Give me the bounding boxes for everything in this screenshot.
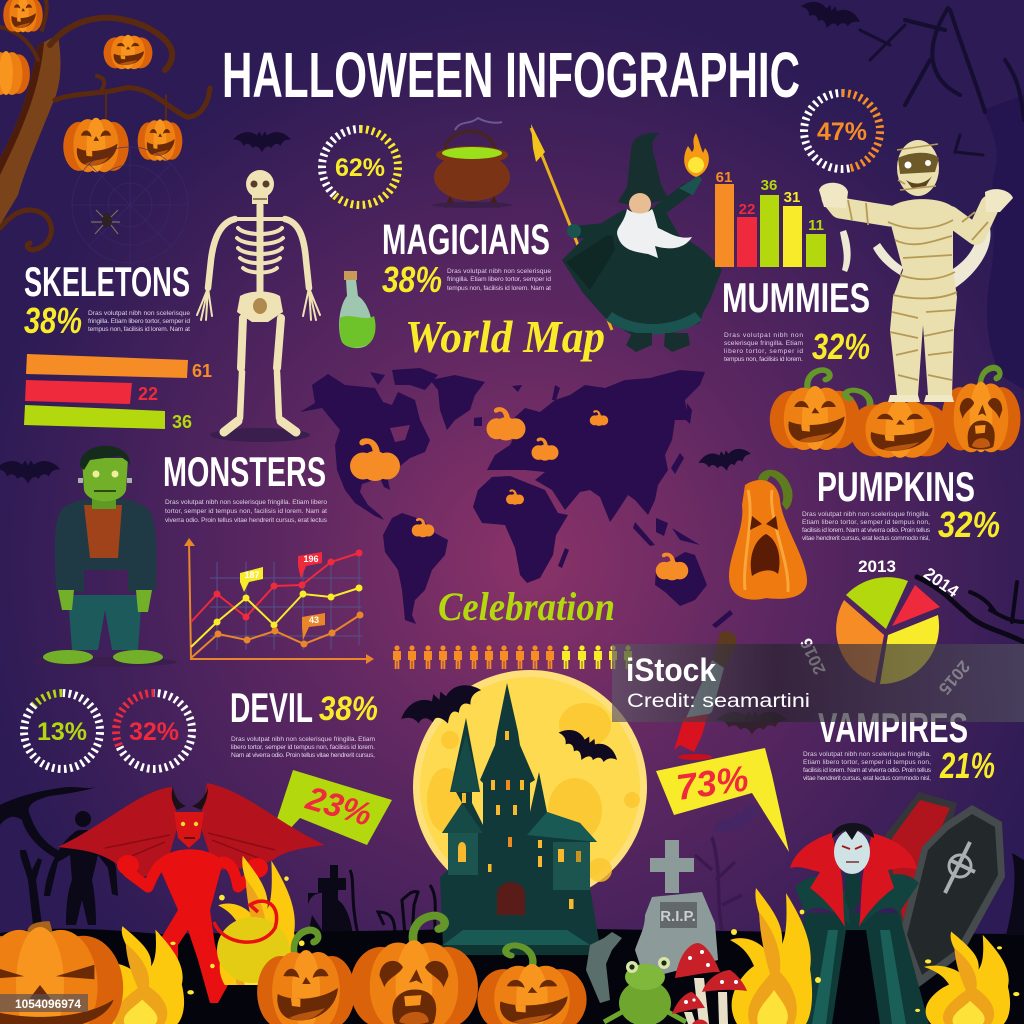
map pumpkin: south america [412,518,434,537]
bat: top right [797,0,862,36]
text: mummies: Dras volutpat nibh non [724,332,803,339]
ground [0,928,1024,1024]
text: devil: Dras volutpat nibh non scelerisque fringilla. Etiam [231,736,376,743]
label: 2014: 2014 [920,564,963,601]
map pumpkin: africa [506,489,524,505]
bar chart: mummies: 22 [739,201,755,218]
bar chart: skeletons: 36 [172,412,192,432]
line chart [184,538,374,664]
devil [58,783,325,1010]
text: skeletons: Dras volutpat nibh non scelerisque [88,310,190,317]
heading: celebration: Celebration [438,584,615,629]
dead tree behind pie [917,577,1024,642]
pictogram row [393,645,632,669]
wizard with staff [531,124,722,352]
flame: behind devil tail [210,856,305,985]
heading: monsters: MONSTERS [163,448,326,495]
pumpkin: hanging large [63,118,129,172]
flag: 187: 187 [244,570,260,580]
silhouettes behind scene [0,787,436,935]
heading: magicians: MAGICIANS [382,216,550,264]
text: monsters [165,499,328,524]
watermark: iStock [626,652,716,688]
tombstone: R.I.P. [660,908,696,925]
tree with pumpkins [0,0,210,250]
text: mummies: tempus non, facilisis id lorem. [724,356,803,363]
bat: on moon [552,724,621,774]
label: 2015: 2015 [935,657,974,698]
tombstone [635,840,718,975]
map pumpkin: australia [656,553,688,580]
donut: 13%: 13% [37,718,87,746]
text: magicians: Dras volutpat nibh non scelerisque [447,268,551,275]
text: skeletons: fringilla. Etiam libero tortor, semper id [88,318,190,325]
text: pumpkins: Etiam libero tortor, semper id tempus non, [802,519,930,526]
text: vampires: Dras volutpat nibh non scelerisque fringilla. [803,751,931,758]
text: vampires: facilisis id lorem. Nam at viverra odio. Proin tellus [803,767,932,774]
mummy [819,140,1013,402]
map pumpkin: asia [590,410,608,426]
bat: left edge [0,460,60,484]
flag: 73%: 73% [674,757,751,808]
percent: devil: 38% [319,690,378,728]
percent: skeletons: 38% [24,300,82,341]
flame ball [217,917,289,983]
donut: 32%: 32% [129,718,179,746]
pumpkin: bottom left [0,921,123,1024]
spider web and spider [72,147,188,263]
text: mummies [724,332,804,363]
label: 2016: 2016 [796,635,830,677]
text: monsters: tortor, semper id tempus non, facilisis id lorem. Nam at [165,508,327,515]
donut: 32% [116,693,192,769]
donut: 62%: 62% [335,154,385,182]
donut: 62% [322,129,398,205]
percent: magicians: 38% [382,259,442,300]
pumpkin: hanging top [3,0,43,32]
text: skeletons [88,310,190,333]
bar chart: skeletons [24,354,212,432]
percent: mummies: 32% [812,326,870,367]
icon: potion bottle [339,271,376,348]
text: devil: libero tortor, semper id tempus non, facilisis id lorem. [231,744,375,751]
map pumpkin: europe [486,407,526,440]
text: devil [231,736,376,759]
bar chart: mummies: 11 [808,217,824,234]
pumpkin: bottom center left [257,930,355,1024]
map pumpkin: middle east [532,438,558,461]
flag: 43 [302,613,325,640]
flag: 23%: 23% [301,779,376,833]
bat: right of map [697,446,753,475]
vampire [785,823,929,1024]
dead trees top right [860,8,1024,390]
heading: skeletons: SKELETONS [24,258,190,305]
mushrooms [672,943,747,1024]
text: magicians: tempus non, facilisis id lorem. Nam at [447,285,551,292]
bar chart: mummies: 36 [761,177,777,194]
monster [33,446,177,667]
pumpkin: center [845,390,950,458]
watermark [612,644,1024,722]
icon: cauldron [432,118,512,208]
flag: 73% [656,748,789,852]
heading: mummies: MUMMIES [722,274,870,321]
flag: 23% [275,770,392,845]
text: magicians: fringilla. Etiam libero tortor, semper id [447,276,551,283]
percent: pumpkins: 32% [938,504,1000,545]
zombie hand [586,932,622,1003]
donut: 47%: 47% [817,118,867,146]
donut: 13% [24,693,100,769]
heading: world map: World Map [405,311,605,362]
text: vampires: Etiam libero tortor, semper id tempus non, [803,759,931,766]
watermark: Credit: seamartini [627,691,810,712]
bar chart: mummies [715,169,826,267]
moon [413,670,647,904]
text: mummies: libero tortor, semper id [724,348,803,355]
pumpkins under mummy [770,368,1021,458]
text: vampires: vitae hendrerit cursus, erat lectus commodo nisl, [803,775,931,782]
pumpkin: right [941,368,1021,452]
world map [300,368,733,628]
bar chart: skeletons: 22 [138,384,158,404]
flag: 196: 196 [303,554,319,564]
bat: above skeleton [233,131,291,152]
text: mummies: scelerisque fringilla. Etiam [724,340,804,347]
pumpkin: hanging small [138,119,182,161]
dead tree center right [695,837,742,930]
map pumpkin: north america [350,438,400,481]
text: pumpkins: Dras volutpat nibh non scelerisque fringilla. [802,511,930,518]
heading: devil: DEVIL [230,684,313,731]
pumpkin: bottom center right [477,945,587,1024]
text: monsters: viverra odio. Proin tellus vitae hendrerit cursus, erat lectus [165,517,328,524]
flag: 43: 43 [309,615,319,625]
text: devil: Nam at viverra odio. Proin tellus vitae hendrerit cursus, [231,752,375,759]
text: pumpkins: vitae hendrerit cursus, erat lectus commodo nisl, [802,535,930,542]
pumpkin: hanging upper [104,35,152,69]
skeleton [197,170,320,442]
text: vampires [803,751,932,782]
pumpkin: hanging left [0,51,30,95]
coffins [885,792,1024,987]
bat: left of castle [397,678,488,738]
percent: vampires: 21% [939,745,995,786]
flame: right [915,932,1019,1024]
pumpkin: left [770,370,860,450]
stock id tag [0,994,88,1012]
flag: 196 [298,552,322,579]
pie chart [796,557,974,698]
flag: 187 [240,567,263,592]
text: pumpkins [802,511,931,542]
gourd pumpkin [729,470,807,600]
donut: 47% [804,93,880,169]
text: pumpkins: facilisis id lorem. Nam at viverra odio. Proin tellus [802,527,931,534]
pumpkin: bottom center [350,916,478,1024]
flame: center right [722,888,821,1024]
text: monsters: Dras volutpat nibh non scelerisque fringilla. Etiam libero [165,499,327,506]
castle [430,683,610,955]
bat: behind vampire heading [716,711,788,735]
flame: left [85,926,194,1024]
ghost bat [709,802,767,844]
devil tail [214,901,277,942]
bar chart: mummies: 31 [784,189,800,206]
bar chart: skeletons: 61 [192,361,212,381]
bar chart: mummies: 61 [716,169,732,186]
text: skeletons: tempus non, facilisis id lorem. Nam at [88,326,190,333]
stock id tag: 1054096974 [15,999,82,1011]
text: magicians [447,268,551,292]
label: 2013: 2013 [858,557,896,576]
frog [604,957,686,1024]
knife with blood [674,632,736,760]
